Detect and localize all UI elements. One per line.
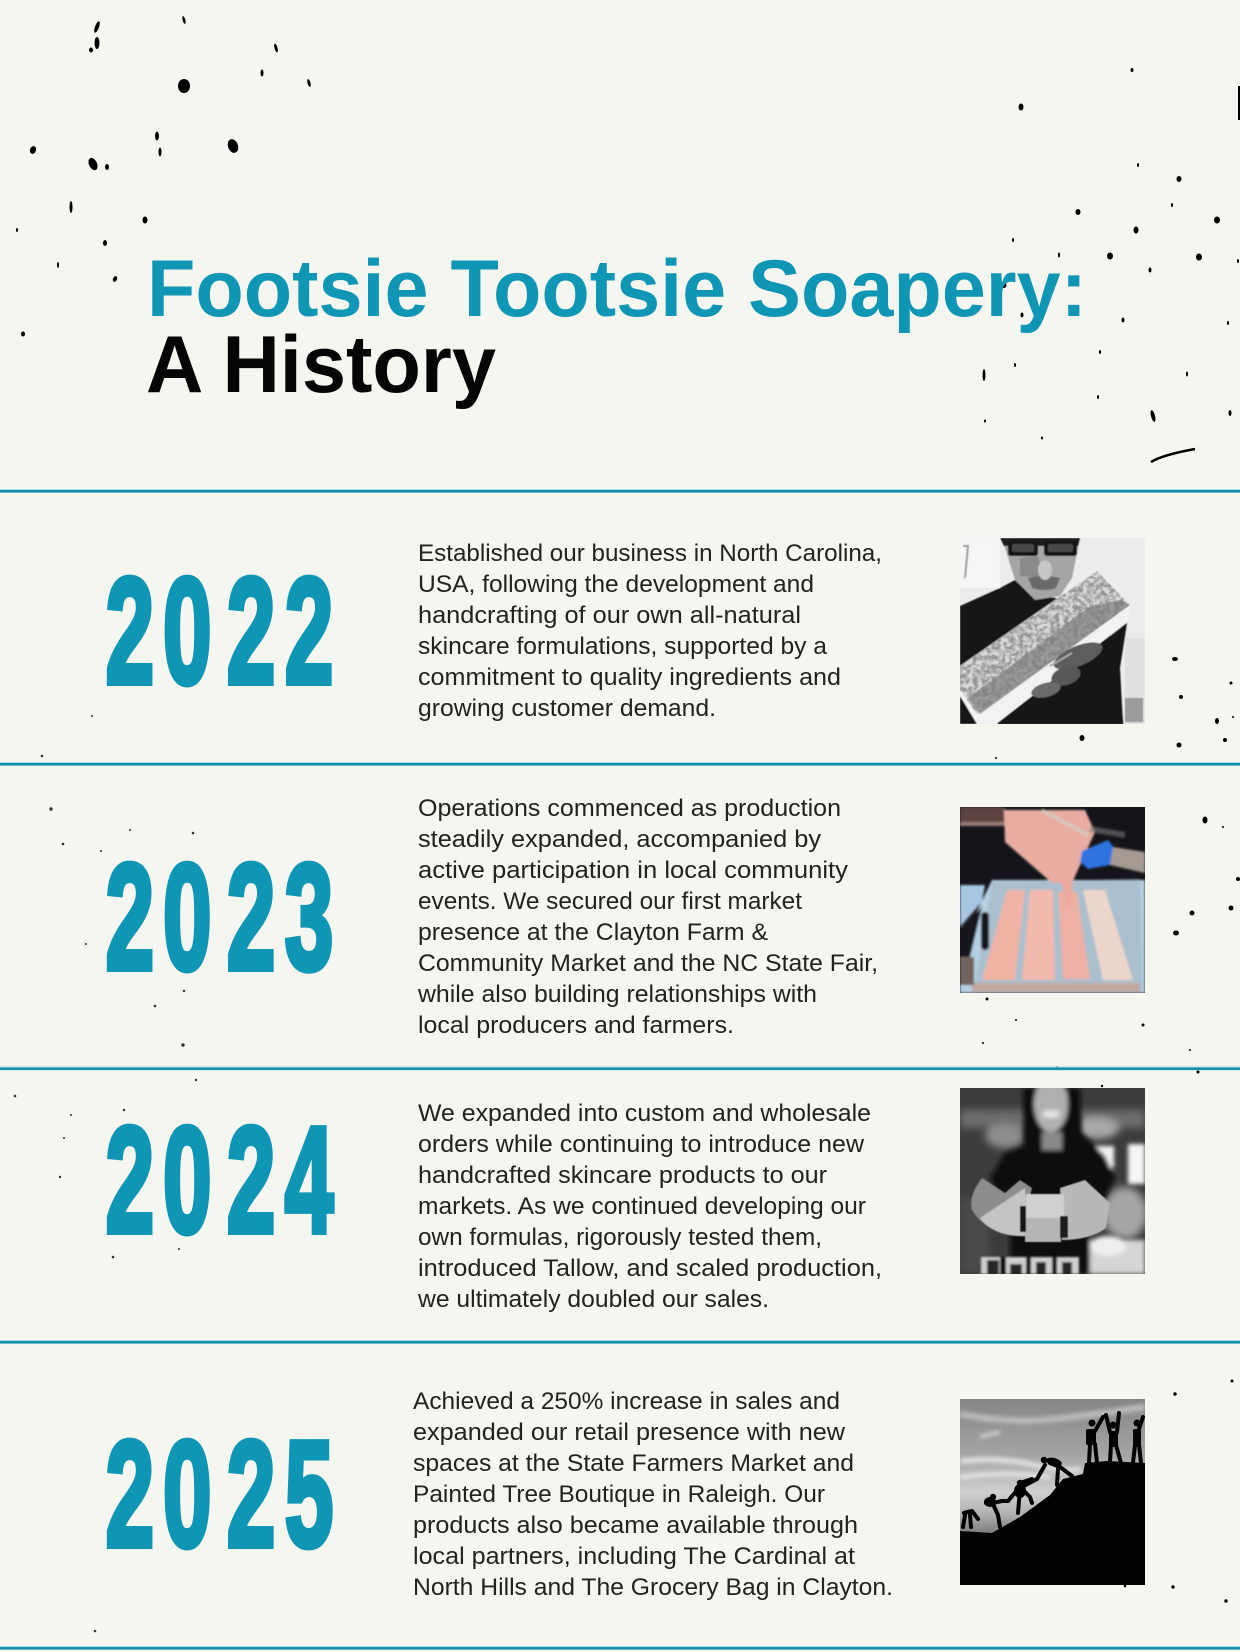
description 2022: USA, following the development and — [418, 571, 814, 598]
panel: 2022 — [106, 538, 1145, 724]
description 2024: introduced Tallow, and scaled production, — [418, 1255, 882, 1282]
panel: 2023 — [106, 795, 1145, 1039]
description 2023: while also building relationships with — [417, 981, 817, 1008]
description 2022: handcrafting of our own all-natural — [418, 602, 801, 629]
panel: 2024 — [106, 1076, 1147, 1313]
description 2025: products also became available through — [413, 1512, 858, 1539]
description 2022: growing customer demand. — [418, 695, 716, 722]
description 2022: Established our business in North Carolina, — [418, 540, 882, 567]
description 2023: Community Market and the NC State Fair, — [418, 950, 878, 977]
photo: silhouettes helping each other up a hill — [960, 1399, 1145, 1585]
description 2022: skincare formulations, supported by a — [418, 633, 827, 660]
year 2023: 2023 — [106, 833, 333, 1002]
description 2022 — [418, 540, 882, 722]
photo: man holding soap loaf — [960, 538, 1145, 724]
panel: 2025 — [106, 1388, 1145, 1601]
description 2025: Painted Tree Boutique in Raleigh. Our — [413, 1481, 825, 1508]
title: A History — [146, 320, 496, 410]
description 2024: we ultimately doubled our sales. — [417, 1286, 769, 1313]
description 2023: events. We secured our first market — [418, 888, 802, 915]
description 2024: We expanded into custom and wholesale — [418, 1100, 871, 1127]
figures on summit — [1089, 1417, 1103, 1463]
description 2024: own formulas, rigorously tested them, — [418, 1224, 822, 1251]
description 2024: orders while continuing to introduce new — [418, 1131, 864, 1158]
description 2023: Operations commenced as production — [418, 795, 841, 822]
photo: pouring pink soap into mold — [960, 807, 1145, 993]
description 2023: local producers and farmers. — [418, 1012, 734, 1039]
description 2024: markets. As we continued developing our — [418, 1193, 866, 1220]
year 2022: 2022 — [106, 547, 333, 716]
description 2025: spaces at the State Farmers Market and — [413, 1450, 854, 1477]
title: Footsie Tootsie Soapery: — [147, 244, 1087, 334]
description 2025: local partners, including The Cardinal at — [413, 1543, 855, 1570]
description 2025 — [413, 1388, 893, 1601]
title — [146, 244, 1087, 410]
description 2023 — [417, 795, 878, 1039]
description 2025: Achieved a 250% increase in sales and — [413, 1388, 840, 1415]
description 2023: steadily expanded, accompanied by — [418, 826, 822, 853]
description 2025: expanded our retail presence with new — [413, 1419, 845, 1446]
description 2025: North Hills and The Grocery Bag in Clayton. — [413, 1574, 893, 1601]
photo: woman presenting soap bar — [960, 1076, 1147, 1274]
year 2024: 2024 — [106, 1096, 333, 1265]
description 2023: active participation in local community — [418, 857, 849, 884]
description 2022: commitment to quality ingredients and — [418, 664, 841, 691]
description 2024 — [417, 1100, 882, 1313]
description 2023: presence at the Clayton Farm & — [418, 919, 768, 946]
year 2025: 2025 — [106, 1410, 333, 1579]
description 2024: handcrafted skincare products to our — [418, 1162, 827, 1189]
